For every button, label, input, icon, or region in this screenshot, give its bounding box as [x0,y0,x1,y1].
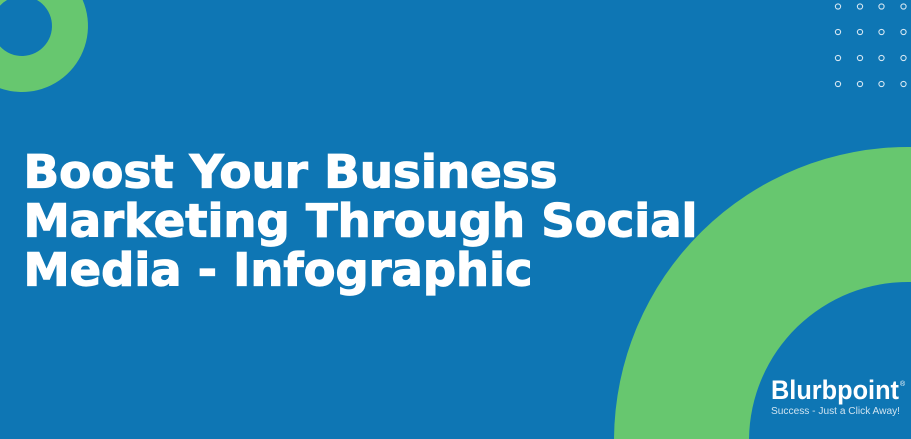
logo: Blurbpoint: ® [900,380,906,388]
title: Boost Your Business [24,146,558,198]
dot grid [835,4,906,87]
top-left green ring [0,0,88,92]
title: Marketing Through Social [24,195,698,248]
bottom-right green ring [614,147,911,439]
title [24,146,698,297]
title: Media - Infographic [24,244,532,297]
logo: Blurbpoint: Success - Just a Click Away! [771,406,900,417]
logo: Blurbpoint: Blurbpoint [771,375,899,405]
